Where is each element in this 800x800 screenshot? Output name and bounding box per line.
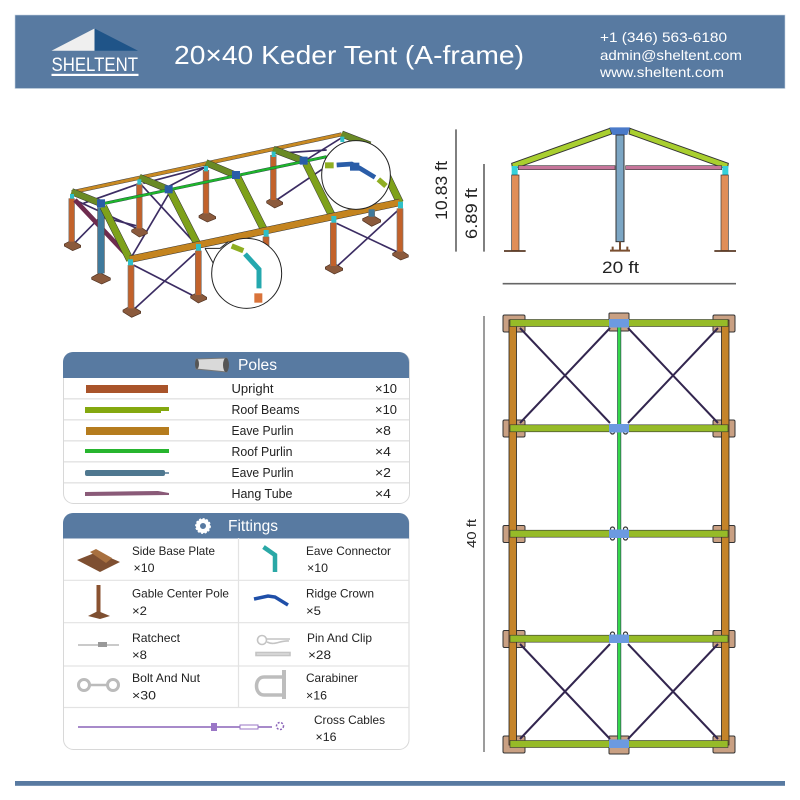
ridge crown bbox=[254, 596, 288, 605]
fitting labels: ×30 bbox=[132, 688, 156, 702]
logo bbox=[52, 28, 138, 76]
fittings heading: Fittings bbox=[228, 518, 278, 535]
front elevation bbox=[456, 127, 736, 284]
fitting labels: Cross Cables bbox=[314, 713, 385, 727]
roof beams bbox=[510, 320, 728, 748]
roof purlin bbox=[618, 326, 621, 742]
fitting labels: Ratchect bbox=[132, 631, 181, 645]
pole rows: Roof Beams bbox=[232, 403, 300, 417]
carabiner bbox=[256, 670, 284, 699]
3D frame drawing bbox=[64, 134, 408, 317]
fitting labels: Pin And Clip bbox=[307, 631, 372, 645]
dimension: 10.83 ft: 10.83 ft bbox=[433, 161, 451, 220]
title: 20×40 Keder Tent (A-frame) bbox=[174, 40, 524, 70]
fitting labels: Gable Center Pole bbox=[132, 586, 229, 600]
ridge crowns bbox=[609, 319, 629, 748]
pole rows: ×10 bbox=[375, 403, 397, 417]
roof beams bbox=[512, 128, 728, 169]
pole rows: ×4 bbox=[375, 487, 391, 501]
logo: SHELTENT bbox=[52, 55, 138, 76]
panel: fittings bbox=[63, 513, 409, 750]
plan view bbox=[464, 313, 735, 754]
ridge crowns bbox=[97, 157, 308, 207]
cross cable bbox=[78, 722, 284, 731]
plate bolts bbox=[610, 430, 628, 636]
pole rows: Upright bbox=[232, 382, 274, 396]
eave connector bbox=[264, 547, 275, 572]
pole rows bbox=[232, 382, 397, 501]
uprights bbox=[512, 175, 728, 251]
header banner bbox=[15, 15, 785, 88]
pole rows: Roof Purlin bbox=[232, 445, 293, 459]
fitting labels: ×16 bbox=[316, 730, 337, 744]
poles icon bbox=[195, 358, 229, 372]
pole rows: Hang Tube bbox=[232, 487, 293, 501]
fitting labels: Bolt And Nut bbox=[132, 671, 201, 685]
gable centre pole bbox=[90, 207, 112, 273]
cross cables bbox=[520, 328, 718, 739]
fitting labels: Side Base Plate bbox=[132, 544, 215, 558]
ridge crown bbox=[609, 127, 630, 135]
pole rows: ×2 bbox=[375, 466, 391, 480]
eave connectors bbox=[512, 166, 518, 175]
ratchet bbox=[78, 642, 119, 647]
fitting labels: ×28 bbox=[308, 648, 331, 662]
fitting labels: Carabiner bbox=[306, 671, 358, 685]
dimension: 6.89 ft: 6.89 ft bbox=[463, 188, 481, 239]
base plates bbox=[503, 313, 735, 754]
fitting labels: Eave Connector bbox=[306, 544, 391, 558]
detail circle: eave bbox=[205, 238, 282, 308]
pole rows: ×10 bbox=[375, 382, 397, 396]
roof beams bbox=[72, 134, 400, 260]
pole rows: Eave Purlin bbox=[232, 466, 294, 480]
gear icon bbox=[196, 519, 210, 533]
contact details: admin@sheltent.com bbox=[600, 47, 742, 63]
fitting labels: ×5 bbox=[306, 604, 321, 618]
fitting icons bbox=[77, 547, 290, 731]
dimension: 20 ft: 20 ft bbox=[602, 259, 639, 277]
connectors bbox=[70, 137, 403, 265]
dimension lines bbox=[456, 129, 736, 284]
fitting labels: Ridge Crown bbox=[306, 586, 374, 600]
back eave purlin bbox=[72, 134, 342, 192]
pin and clip bbox=[256, 636, 290, 656]
fitting labels: ×10 bbox=[307, 561, 328, 575]
hang tubes bbox=[518, 166, 722, 170]
contact details bbox=[599, 29, 742, 80]
front uprights bbox=[131, 208, 400, 308]
centre pole bbox=[616, 135, 624, 242]
fitting labels: ×10 bbox=[134, 561, 155, 575]
pole rows: ×8 bbox=[375, 424, 391, 438]
contact details: +1 (346) 563-6180 bbox=[600, 29, 727, 45]
pole icons bbox=[85, 385, 169, 496]
centre base bbox=[610, 242, 630, 251]
gable hang tube bbox=[75, 200, 128, 257]
panel: poles bbox=[63, 352, 410, 504]
side base plate bbox=[77, 549, 120, 572]
front eave purlin bbox=[130, 202, 400, 259]
base plates bbox=[504, 248, 736, 253]
gable center pole bbox=[88, 585, 110, 619]
poles heading: Poles bbox=[238, 357, 277, 374]
detail circle: ridge bbox=[322, 141, 390, 209]
contact details: www.sheltent.com bbox=[599, 64, 724, 80]
fitting labels: ×2 bbox=[132, 604, 147, 618]
roof purlin bbox=[100, 157, 327, 204]
base plates bbox=[64, 197, 408, 317]
eave purlins bbox=[509, 320, 729, 745]
fitting labels: ×8 bbox=[132, 648, 147, 662]
dimension line bbox=[483, 316, 485, 752]
pole rows: ×4 bbox=[375, 445, 391, 459]
footer bar bbox=[15, 781, 785, 786]
bolt and nut bbox=[78, 680, 118, 690]
cross cables bbox=[75, 137, 398, 308]
fitting labels bbox=[132, 544, 391, 744]
fitting labels: ×16 bbox=[306, 688, 327, 702]
back uprights bbox=[72, 155, 273, 242]
pole rows: Eave Purlin bbox=[232, 424, 294, 438]
dimension: 40 ft: 40 ft bbox=[464, 519, 479, 548]
